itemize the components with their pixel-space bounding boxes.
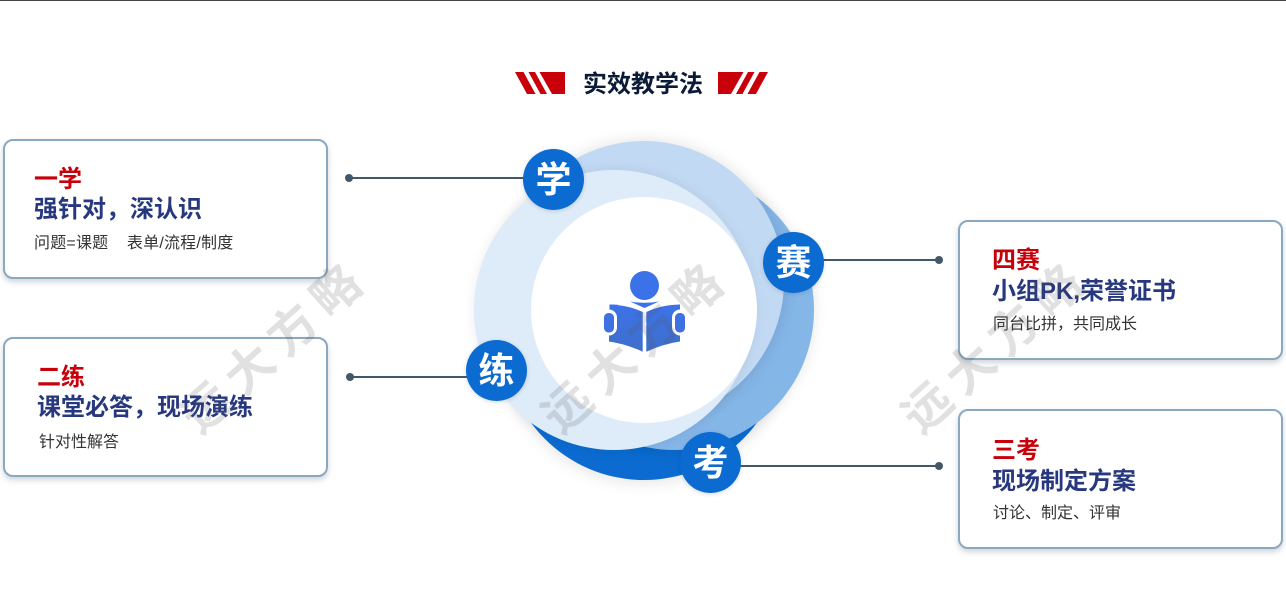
badge: 练: 练	[478, 350, 514, 391]
panel: 四赛	[958, 220, 1283, 360]
card heading: 四赛	[992, 247, 1040, 274]
card detail text: 针对性解答	[39, 434, 119, 451]
badge: 学: 学	[535, 159, 572, 200]
card detail text: 讨论、制定、评审	[993, 505, 1121, 522]
watermarks: 远大方略: 远大方略	[893, 249, 1101, 444]
card subheading: 现场制定方案	[992, 468, 1136, 495]
circle: palest blue	[474, 170, 754, 450]
connector: 练 line	[346, 373, 467, 381]
badge: 练	[466, 340, 527, 401]
watermarks: 远大方略: 远大方略	[172, 249, 380, 444]
circle: mid blue	[534, 170, 814, 450]
card subheading: 课堂必答，现场演练	[37, 394, 253, 421]
connector: 考 line	[740, 462, 943, 470]
icon: person reading book	[604, 271, 685, 352]
card detail text: 同台比拼，共同成长	[993, 316, 1137, 333]
badge: 学	[523, 149, 584, 210]
watermarks: 远大方略: 远大方略	[533, 249, 741, 444]
central circle diagram	[464, 136, 826, 496]
card heading: 二练	[37, 364, 85, 391]
panel: 二练	[3, 337, 328, 477]
panel: 一学	[3, 139, 328, 279]
card heading: 一学	[34, 166, 82, 193]
badge: 赛: 赛	[775, 242, 812, 283]
badge: 考	[680, 432, 741, 493]
heading: 实效教学法	[515, 71, 768, 98]
circle: dark blue	[504, 200, 784, 480]
connector: 学 line	[345, 174, 524, 182]
card heading: 三考	[992, 437, 1040, 464]
badge: 赛	[763, 232, 824, 293]
circle: white center	[531, 197, 757, 423]
card detail text: 问题=课题 表单/流程/制度	[34, 235, 233, 252]
heading text: 实效教学法	[583, 71, 703, 98]
connector: 赛 line	[824, 256, 943, 264]
card subheading: 小组PK,荣誉证书	[992, 278, 1176, 305]
card subheading: 强针对，深认识	[34, 196, 202, 223]
icon: left red stripes	[515, 72, 768, 94]
panel: 三考	[958, 409, 1283, 549]
badge: 考: 考	[692, 442, 728, 483]
circle: light blue	[504, 141, 784, 421]
